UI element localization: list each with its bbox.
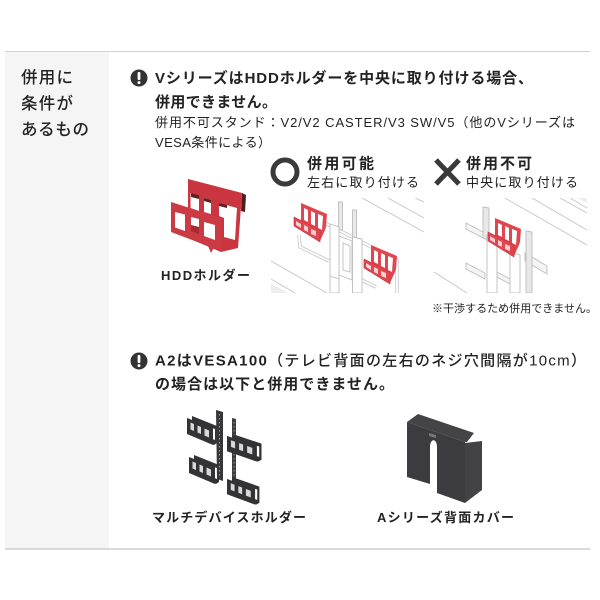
icon: A series back cover	[407, 414, 482, 503]
text: V series warning	[155, 69, 533, 111]
note: interference warning: ※干渉するため併用できません。	[432, 301, 597, 315]
diagram: holder mounted at center	[434, 198, 587, 293]
icon: cross NG	[436, 160, 459, 184]
text: A2 warning: の場合は以下と併用できません。	[155, 375, 394, 393]
heading: left column label: あるもの	[21, 120, 89, 139]
text: compatible label: 左右に取り付ける	[307, 175, 419, 190]
label: HDD holder: HDDホルダー	[161, 268, 250, 283]
diagram: holders mounted left and right	[271, 198, 424, 293]
icon: exclamation 1	[130, 70, 148, 86]
icon: circle OK	[273, 160, 297, 184]
label: A series back cover: Aシリーズ背面カバー	[377, 510, 514, 525]
text: incompatible label	[466, 154, 578, 190]
heading: left column label: 併用に	[21, 68, 73, 87]
text: compatible label	[307, 154, 419, 190]
text: V series warning: 併用できません。	[155, 93, 277, 111]
text: incompatible stands note: VESA条件による）	[155, 135, 271, 150]
text: A2 warning	[155, 352, 586, 393]
icon: multi device holder	[187, 410, 262, 505]
heading: left column label: 条件が	[21, 93, 74, 113]
panel: left label column	[5, 52, 109, 549]
heading: left column label	[21, 68, 89, 139]
text: incompatible stands note: 併用不可スタンド：V2/V2 CASTER/V3 SW/V5（他のVシリーズは	[155, 115, 575, 130]
text: V series warning: VシリーズはHDDホルダーを中央に取り付ける場合、	[155, 69, 533, 87]
text: incompatible label: 中央に取り付ける	[466, 175, 578, 190]
text: compatible label: 併用可能	[307, 154, 374, 172]
icon: HDD holder in red	[171, 179, 246, 253]
label: multi device holder: マルチデバイスホルダー	[152, 510, 306, 525]
icon: exclamation 2	[130, 352, 148, 370]
text: A2 warning: A2はVESA100（テレビ背面の左右のネジ穴間隔が10cm）	[155, 352, 586, 370]
text: incompatible stands note	[155, 115, 575, 150]
text: incompatible label: 併用不可	[466, 154, 532, 172]
